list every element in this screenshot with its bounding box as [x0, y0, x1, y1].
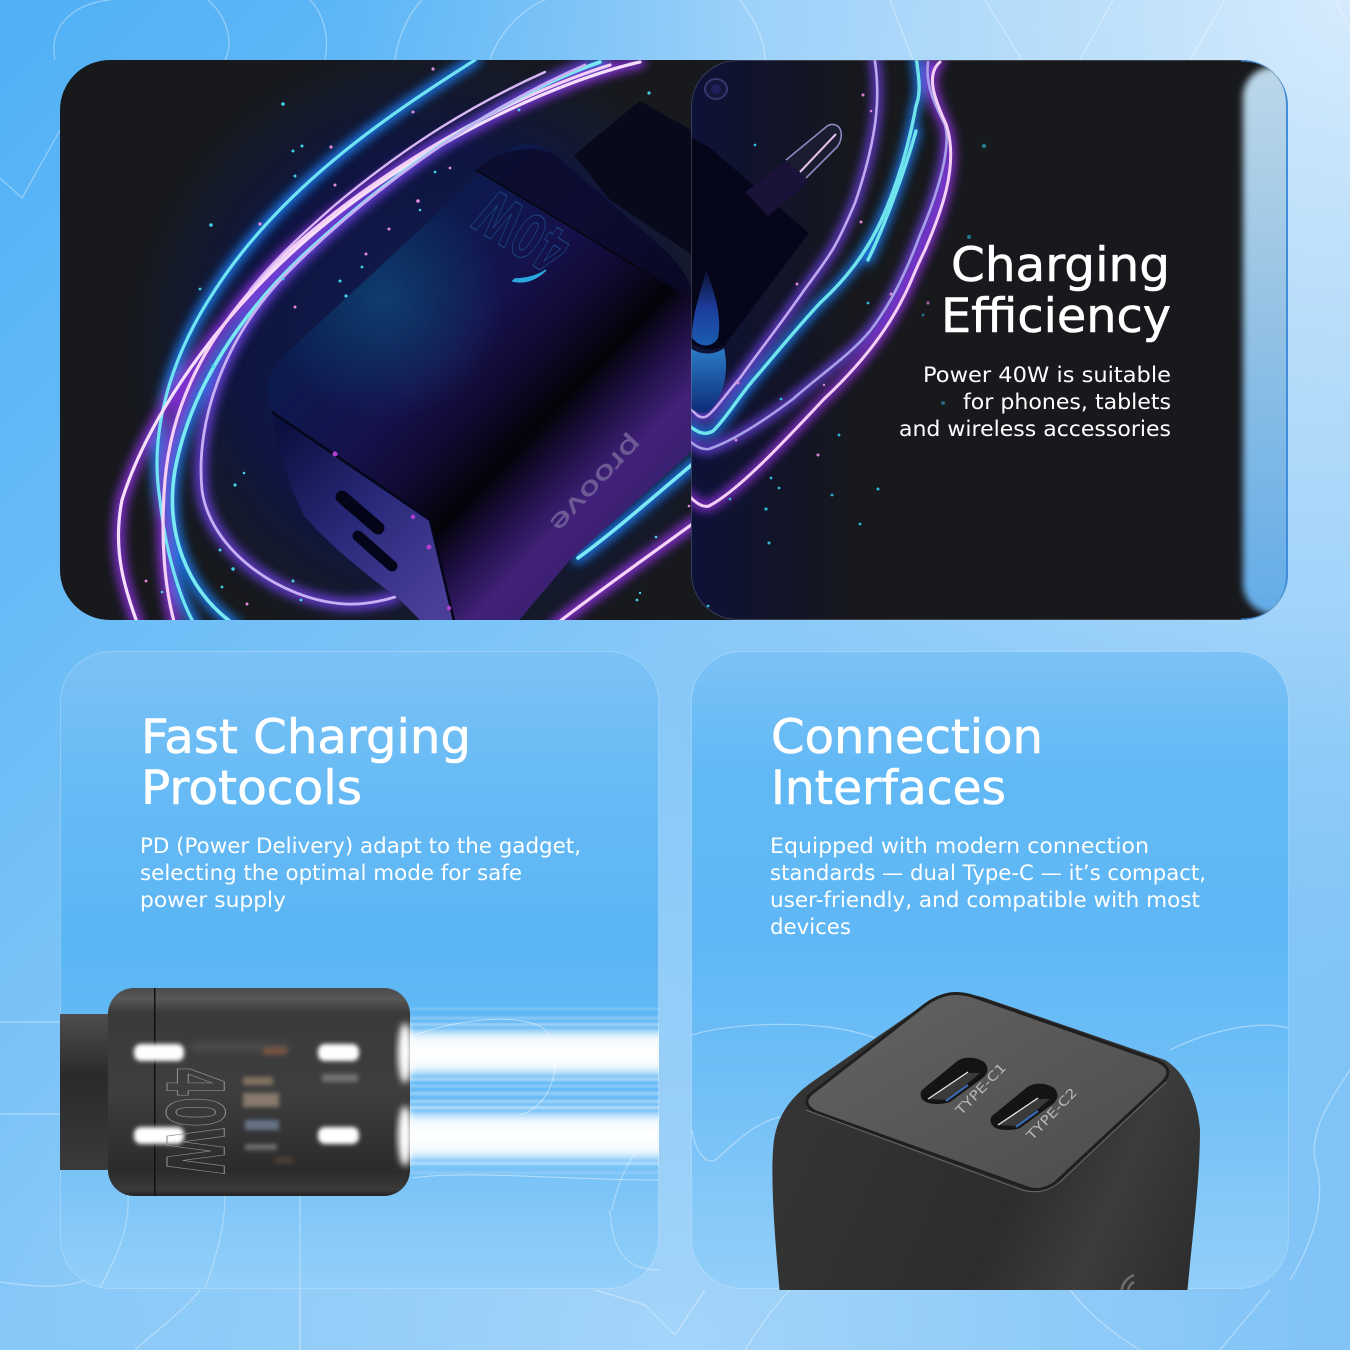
stars right — [707, 94, 986, 607]
panel: connection interfaces — [692, 652, 1288, 1295]
panel: fast charging protocols — [60, 652, 665, 1290]
text: connection description: user-friendly, and compatible with most — [770, 888, 1200, 913]
text: fast charging description: PD (Power Delivery) adapt to the gadget, — [140, 834, 581, 859]
stars left — [145, 67, 690, 605]
text: connection description — [770, 834, 1206, 940]
text: connection description: devices — [770, 915, 851, 940]
heading: fast charging protocols: Fast Charging — [141, 710, 471, 765]
text: fast charging description: selecting the optimal mode for safe — [140, 861, 522, 886]
text: connection description: Equipped with modern connection — [770, 834, 1149, 859]
usb-c ports — [921, 1058, 1081, 1144]
top plate — [807, 994, 1168, 1190]
charger body — [250, 144, 695, 625]
hero right description: and wireless accessories — [899, 417, 1171, 442]
usb-c connector — [60, 988, 412, 1196]
text: fast charging description — [140, 834, 581, 913]
EU plug — [691, 78, 842, 413]
charger plug neck — [574, 101, 691, 254]
hero left image — [60, 60, 780, 625]
heading: fast charging protocols — [141, 710, 471, 816]
usb-c ports: TYPE-C1 — [952, 1061, 1010, 1119]
black charger — [772, 993, 1200, 1295]
panel: charging efficiency hero — [60, 55, 1313, 625]
40W outline label: 40W — [148, 1067, 238, 1175]
proove logo: proove — [544, 429, 648, 538]
port face — [272, 412, 455, 625]
light beams — [405, 1008, 665, 1180]
heading: connection interfaces: Connection — [771, 710, 1043, 765]
usb-c ports: TYPE-C2 — [1023, 1086, 1081, 1144]
text: connection description: standards — dual Type-C — it’s compact, — [770, 861, 1206, 886]
40W marking: 40W — [463, 175, 583, 288]
heading: fast charging protocols: Protocols — [141, 761, 362, 816]
hero right description — [900, 366, 1170, 436]
heading: connection interfaces: Interfaces — [771, 761, 1006, 816]
hero right glass panel — [660, 55, 1313, 620]
hero right heading — [941, 238, 1171, 344]
hero right description: Power 40W is suitable — [923, 363, 1171, 388]
hero right heading: Charging — [951, 238, 1170, 293]
heading: connection interfaces — [771, 710, 1043, 816]
hero right description: for phones, tablets — [963, 390, 1171, 415]
text: fast charging description: power supply — [140, 888, 286, 913]
hero right heading: Efficiency — [941, 289, 1171, 344]
